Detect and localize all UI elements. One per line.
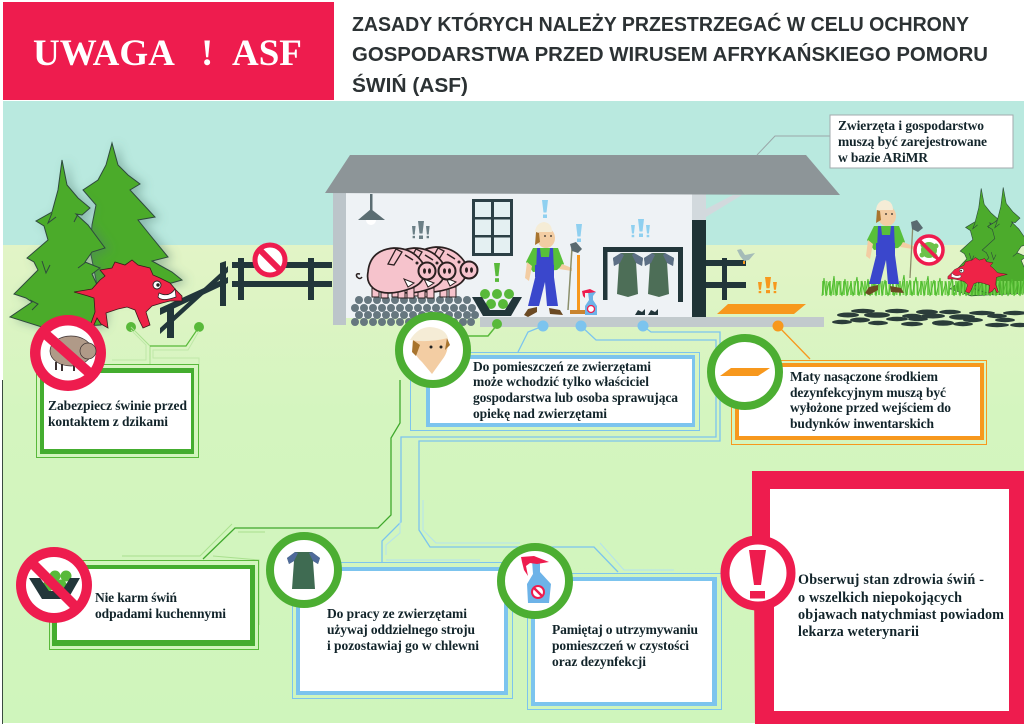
heading xyxy=(352,12,988,97)
heading: GOSPODARSTWA PRZED WIRUSEM AFRYKAŃSKIEGO POMORU xyxy=(352,43,988,66)
right scene: trees xyxy=(950,187,1024,296)
panel: observe pig health: Obserwuj stan zdrowia świń - xyxy=(798,572,984,588)
heading: ŚWIŃ (ASF) xyxy=(352,73,468,97)
registration note xyxy=(830,115,1013,168)
panel: disinfectant mats: Maty nasączone środkiem xyxy=(790,369,939,384)
registration note: muszą być zarejestrowane xyxy=(838,134,987,149)
registration note connector xyxy=(757,136,830,155)
icon: farmer face xyxy=(399,316,467,384)
panel: disinfectant mats: budynków inwentarskich xyxy=(790,416,934,431)
right fence xyxy=(706,258,746,300)
panel: disinfectant mats: wyłożone przed wejściem do xyxy=(790,400,951,415)
header: white band xyxy=(0,0,1024,101)
connector lines: green (boar and fence) xyxy=(112,322,204,395)
panel: cleanliness and disinfection: pomieszczeń w czystości xyxy=(552,638,689,653)
heading: ZASADY KTÓRYCH NALEŻY PRZESTRZEGAĆ W CELU OCHRONY xyxy=(352,12,970,36)
pile of stones xyxy=(351,296,479,326)
panel: observe pig health xyxy=(752,471,1024,724)
panel: protect pigs from wild boars: Zabezpiecz świnie przed xyxy=(48,398,187,413)
panel: access to animal rooms xyxy=(410,352,700,430)
fence xyxy=(160,258,332,338)
right scene: grass xyxy=(822,275,1024,296)
icon: virus prohibited xyxy=(915,236,943,264)
panel: cleanliness and disinfection xyxy=(528,574,722,710)
panel: access to animal rooms: gospodarstwa lub osoba sprawująca xyxy=(473,390,678,405)
panel: cleanliness and disinfection: Pamiętaj o utrzymywaniu xyxy=(552,622,698,637)
panel: access to animal rooms: może wchodzić tylko właściciel xyxy=(473,374,649,389)
title banner: UWAGA ! ASF: ! xyxy=(201,33,213,74)
hoe xyxy=(568,242,582,310)
spray bottle xyxy=(582,289,597,315)
pigs xyxy=(356,247,478,298)
broom xyxy=(570,255,587,314)
icon: exclamation mark xyxy=(725,540,791,606)
panel: separate work clothes xyxy=(292,562,512,698)
disinfectant mat xyxy=(717,304,806,314)
icon: trough prohibited xyxy=(16,547,92,623)
panel: access to animal rooms: opiekę nad zwierzętami xyxy=(473,406,607,421)
panel: disinfectant mats xyxy=(732,360,986,444)
panel: protect pigs from wild boars: kontaktem z dzikami xyxy=(48,414,168,429)
icon: mat xyxy=(711,338,779,406)
title banner: UWAGA ! ASF xyxy=(3,2,334,100)
panel: cleanliness and disinfection: oraz dezynfekcji xyxy=(552,654,646,669)
exclamation marks xyxy=(412,200,777,293)
wild boar xyxy=(74,260,182,328)
panel: separate work clothes: i pozostawiaj go w chlewni xyxy=(327,638,479,653)
panel: protect pigs from wild boars xyxy=(36,364,198,458)
bird xyxy=(737,249,755,264)
connector line: orange xyxy=(772,320,810,359)
connector lines: green (feed to trough box) xyxy=(122,319,502,625)
panel: observe pig health: o wszelkich niepokojących xyxy=(798,590,962,606)
panel: access to animal rooms: Do pomieszczeń ze zwierzętami xyxy=(473,359,651,374)
title banner: UWAGA ! ASF: ASF xyxy=(232,33,302,74)
window xyxy=(473,200,512,255)
panel: observe pig health: objawach natychmiast powiadom xyxy=(798,607,1004,623)
spruce trees left xyxy=(10,143,182,328)
farmer xyxy=(524,222,572,317)
panel: do not feed kitchen waste: Nie karm świń xyxy=(95,590,177,605)
icon: spray bottle xyxy=(501,547,569,615)
panel: observe pig health: lekarza weterynarii xyxy=(798,624,919,640)
icon: apron xyxy=(270,536,338,604)
icon: no entry sign on fence xyxy=(255,245,285,275)
clothes rack with aprons xyxy=(603,247,683,315)
panel: disinfectant mats: dezynfekcyjnym muszą być xyxy=(790,385,946,400)
lamp xyxy=(358,194,385,225)
connector lines: blue xyxy=(382,320,720,572)
feed trough xyxy=(472,289,522,316)
registration note: Zwierzęta i gospodarstwo xyxy=(838,118,984,133)
panel: do not feed kitchen waste: odpadami kuchennymi xyxy=(95,606,226,621)
panel: do not feed kitchen waste xyxy=(50,560,258,650)
panel: separate work clothes: używaj oddzielnego stroju xyxy=(327,622,475,637)
right scene: boar xyxy=(948,258,1007,293)
panel: separate work clothes: Do pracy ze zwierzętami xyxy=(327,606,467,621)
right scene: farmer with hoe xyxy=(865,200,923,295)
icon: pig prohibited xyxy=(30,315,106,391)
registration note: w bazie ARiMR xyxy=(838,150,928,165)
right scene: dark stepping stones xyxy=(832,309,1024,327)
title banner: UWAGA ! ASF: UWAGA xyxy=(33,33,175,74)
building xyxy=(325,155,840,327)
